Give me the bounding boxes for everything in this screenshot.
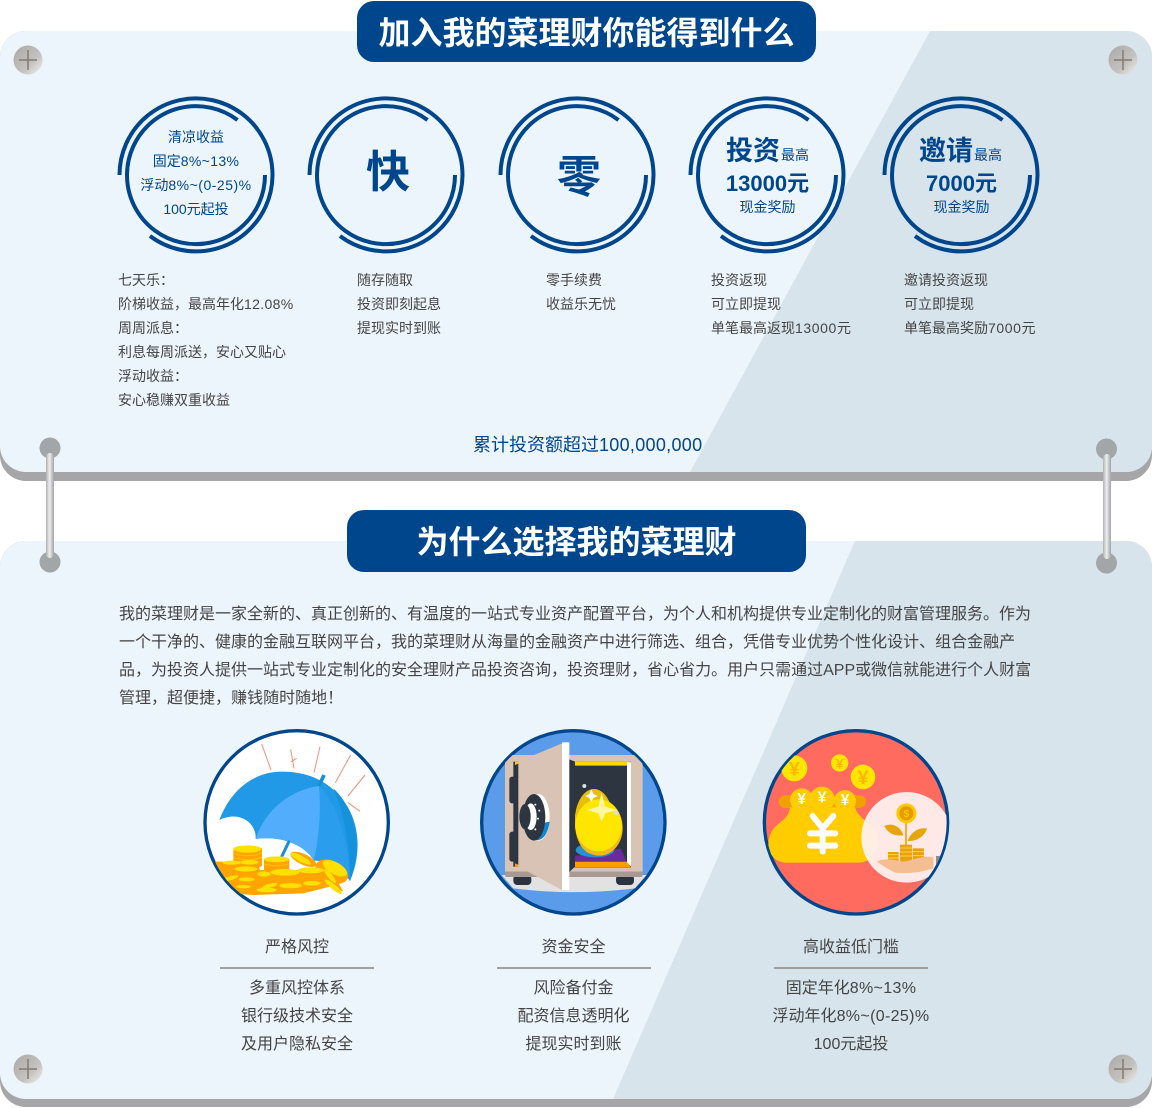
intro paragraph: 管理，超便捷，赚钱随时随地！ [119, 684, 343, 708]
benefit text 1 [118, 270, 294, 408]
feature heading: 资金安全 [541, 939, 606, 956]
benefit text 3 [546, 272, 616, 312]
badge 1 text: 浮动8%~(0-25)% [140, 177, 252, 193]
panel: what you get [0, 31, 1152, 481]
benefit text 2: 随存随取 [357, 272, 413, 288]
feature list: 100元起投 [814, 1036, 888, 1053]
benefit text 1: 阶梯收益，最高年化12.08% [118, 294, 294, 314]
benefit text 5: 邀请投资返现 [904, 272, 988, 288]
intro paragraph: 我的菜理财是一家全新的、真正创新的、有温度的一站式专业资产配置平台，为个人和机构提供专业定制化的财富管理服务。作为 [119, 600, 1031, 624]
badge ring 5 [882, 96, 1040, 254]
icon: money bag and plant: ¥ [818, 790, 827, 807]
title: what you get [357, 1, 816, 62]
caption: 现金奖励 [934, 199, 990, 215]
benefit text 3: 收益乐无忧 [546, 296, 616, 312]
badge ring 4 [688, 96, 846, 254]
divider [220, 967, 374, 969]
benefit text 3: 零手续费 [546, 272, 602, 288]
connector: left rod [40, 438, 60, 572]
benefit text 1: 周周派息： [118, 318, 188, 338]
benefit text 4: 单笔最高返现13000元 [711, 320, 851, 336]
feature heading: 严格风控 [265, 939, 329, 956]
feature list [517, 979, 630, 1053]
panel surface [0, 31, 1152, 472]
feature list: 浮动年化8%~(0-25)% [773, 1008, 929, 1025]
intro paragraph: 品，为投资人提供一站式专业定制化的安全理财产品投资咨询，投资理财，省心省力。用户只需通过APP或微信就能进行个人财富 [119, 656, 1031, 680]
icon: money bag and plant: ¥ [841, 792, 850, 809]
title: why choose: 为什么选择我的菜理财 [416, 524, 736, 560]
benefit text 5: 可立即提现 [904, 296, 974, 312]
intro paragraph [119, 600, 1031, 708]
icon: money bag and plant: ¥ [797, 791, 806, 808]
benefit text 2: 投资即刻起息 [357, 296, 441, 312]
icon: money bag and plant: ¥ [789, 759, 800, 780]
icon: umbrella over coins [203, 729, 390, 916]
benefit text 5: 单笔最高奖励7000元 [904, 320, 1036, 336]
icon: money bag and plant: ¥ [858, 768, 869, 789]
benefit text 1: 浮动收益： [118, 366, 188, 386]
benefit text 5 [904, 272, 1036, 336]
feature 3: high yield [773, 938, 929, 1053]
badge ring 1 [118, 96, 274, 254]
badge 2 text: 快 [366, 148, 410, 197]
total invested: 累计投资额超过100,000,000 [473, 435, 702, 455]
feature 2: fund safety [497, 938, 651, 1053]
panel surface [0, 541, 1152, 1099]
badge 1 text: 清凉收益 [168, 129, 224, 145]
benefit text 2 [357, 272, 441, 336]
benefit text 1: 七天乐： [118, 270, 174, 290]
feature list: 风险备付金 [533, 980, 614, 997]
feature list [773, 979, 929, 1053]
badge 1 text [140, 129, 252, 217]
benefit text 2: 提现实时到账 [357, 320, 441, 336]
feature heading: 高收益低门槛 [803, 939, 899, 956]
feature 1: risk control [220, 938, 374, 1053]
divider [774, 967, 928, 969]
feature list: 银行级技术安全 [241, 1008, 353, 1025]
benefit text 4: 可立即提现 [711, 296, 781, 312]
badge 1 text: 固定8%~13% [153, 153, 239, 169]
amount: 7000元 [926, 171, 997, 196]
feature list [241, 979, 353, 1053]
title: what you get: 加入我的菜理财你能得到什么 [378, 15, 794, 51]
badge 1 text: 100元起投 [163, 201, 229, 217]
caption: 现金奖励 [740, 199, 796, 215]
intro paragraph: 一个干净的、健康的金融互联网平台，我的菜理财从海量的金融资产中进行筛选、组合，凭借专业优势个性化设计、组合金融产 [119, 628, 1015, 652]
icon: money bag and plant: $ [904, 809, 910, 820]
feature list: 及用户隐私安全 [241, 1036, 353, 1053]
badge 4 text [726, 136, 809, 215]
badge 5 text [919, 136, 1002, 215]
badge ring 3 [498, 96, 656, 254]
feature list: 提现实时到账 [525, 1036, 622, 1053]
feature list: 多重风控体系 [249, 980, 345, 997]
badge 3 text: 零 [557, 153, 601, 202]
amount: 13000元 [726, 171, 809, 196]
divider [496, 967, 650, 969]
badge ring 2 [308, 96, 464, 254]
heading: 邀请最高 [919, 136, 1002, 166]
icon: safe with golden egg [480, 729, 667, 916]
icon: money bag and plant: ¥ [836, 755, 844, 771]
heading: 投资最高 [726, 136, 809, 166]
benefit text 4: 投资返现 [711, 272, 767, 288]
benefit text 1: 安心稳赚双重收益 [118, 392, 230, 408]
panel: why choose [0, 541, 1152, 1107]
benefit text 4 [711, 272, 851, 336]
connector: right rod [1096, 438, 1117, 574]
title: why choose [347, 510, 806, 572]
feature list: 固定年化8%~13% [786, 980, 916, 997]
benefit text 1: 利息每周派送，安心又贴心 [118, 342, 286, 362]
icon: money bag and plant [762, 729, 950, 916]
feature list: 配资信息透明化 [517, 1008, 630, 1025]
